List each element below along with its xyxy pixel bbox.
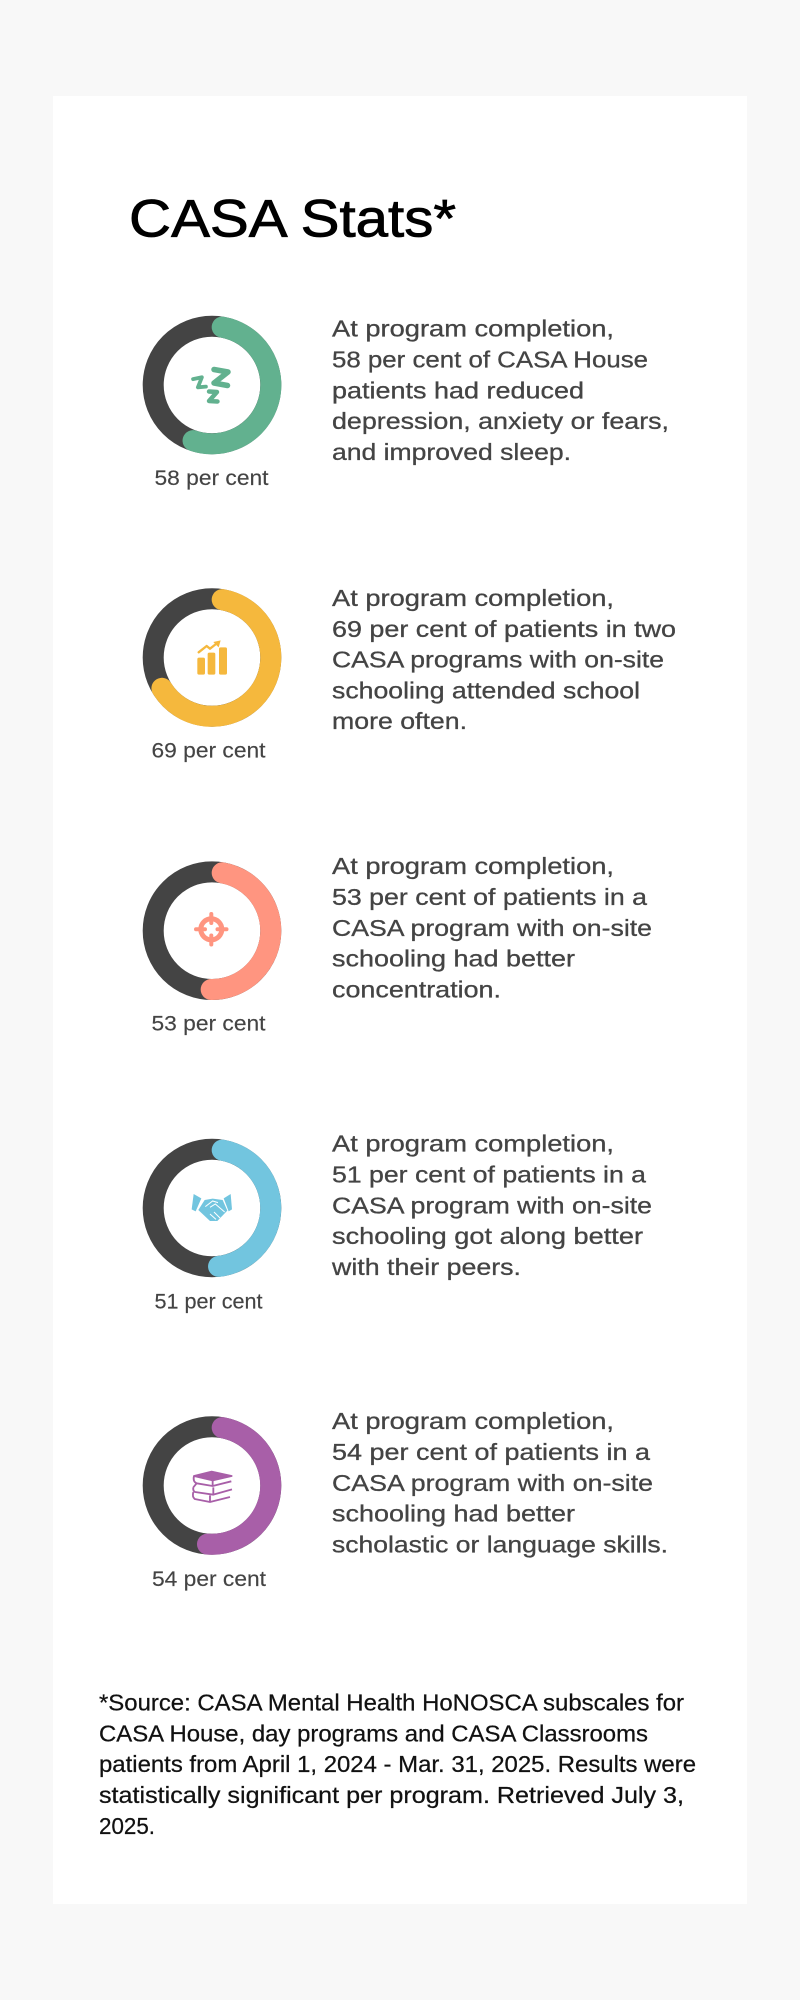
source footnote: CASA House, day programs and CASA Classrooms	[99, 1720, 648, 1746]
donut chart: 54 per cent	[153, 1427, 271, 1544]
stat row: 54 per cent scholastic skills	[152, 1408, 668, 1591]
donut chart: 51 per cent	[153, 1149, 271, 1267]
text block: sleep: 58 per cent of CASA House	[332, 346, 648, 372]
source footnote: 2025.	[99, 1813, 155, 1839]
text block: school attendance: 69 per cent of patients in two	[332, 616, 676, 642]
icon: rising bar chart	[197, 640, 227, 675]
text block: school attendance: schooling attended school	[332, 677, 640, 703]
text block: sleep: and improved sleep.	[332, 439, 571, 465]
text block: school attendance: At program completion,	[332, 585, 614, 611]
text block: sleep: depression, anxiety or fears,	[332, 408, 669, 434]
stat row: 51 per cent peers	[153, 1131, 652, 1313]
label: 51 per cent: 51 per cent	[154, 1290, 263, 1313]
text block: sleep	[332, 316, 669, 465]
icon: handshake	[192, 1194, 232, 1221]
donut chart: 69 per cent	[153, 599, 271, 716]
text block: peers: CASA program with on-site	[332, 1192, 652, 1218]
text block: school attendance	[332, 585, 676, 734]
donut chart: 58 per cent	[153, 326, 271, 444]
text block: concentration: 53 per cent of patients in a	[332, 884, 648, 910]
text block: school attendance: more often.	[332, 708, 467, 734]
label: 58 per cent: 58 per cent	[154, 467, 269, 490]
donut chart: 53 per cent	[153, 872, 271, 990]
text block: school attendance: CASA programs with on-site	[332, 647, 664, 673]
source footnote: *Source: CASA Mental Health HoNOSCA subscales for	[99, 1690, 684, 1716]
source footnote	[99, 1690, 696, 1839]
stat row: 53 per cent concentration	[152, 853, 652, 1036]
panel: white card	[53, 96, 747, 1904]
icon: stack of books	[193, 1472, 232, 1502]
text block: sleep: At program completion,	[332, 316, 614, 342]
text block: concentration: At program completion,	[332, 853, 614, 879]
source footnote: statistically significant per program. Retrieved July 3,	[99, 1782, 684, 1808]
text block: concentration	[332, 853, 652, 1003]
label: 54 per cent: 54 per cent	[152, 1568, 266, 1591]
stat row: 69 per cent school attendance	[152, 585, 676, 763]
text block: scholastic skills: scholastic or language skills.	[332, 1532, 668, 1558]
text block: concentration: CASA program with on-site	[332, 915, 652, 941]
label: 69 per cent: 69 per cent	[152, 740, 266, 763]
text block: peers: with their peers.	[331, 1254, 521, 1280]
source footnote: patients from April 1, 2024 - Mar. 31, 2025. Results were	[99, 1751, 696, 1777]
text block: peers: At program completion,	[332, 1131, 614, 1157]
text block: scholastic skills: 54 per cent of patients in a	[332, 1439, 651, 1465]
text block: peers	[331, 1131, 652, 1280]
text block: peers: 51 per cent of patients in a	[332, 1162, 647, 1188]
text block: concentration: concentration.	[332, 977, 501, 1003]
text block: peers: schooling got along better	[332, 1223, 643, 1249]
stat row: 58 per cent sleep	[153, 316, 669, 490]
text block: sleep: patients had reduced	[332, 377, 584, 403]
icon: sleep zzz	[193, 370, 228, 402]
icon: crosshair target	[196, 914, 226, 944]
text block: scholastic skills	[332, 1408, 668, 1558]
text block: scholastic skills: CASA program with on-site	[332, 1470, 653, 1496]
text block: concentration: schooling had better	[332, 946, 575, 972]
title: CASA Stats*	[129, 190, 456, 248]
text block: scholastic skills: schooling had better	[332, 1501, 575, 1527]
text block: scholastic skills: At program completion,	[332, 1408, 614, 1434]
label: 53 per cent: 53 per cent	[152, 1013, 266, 1036]
